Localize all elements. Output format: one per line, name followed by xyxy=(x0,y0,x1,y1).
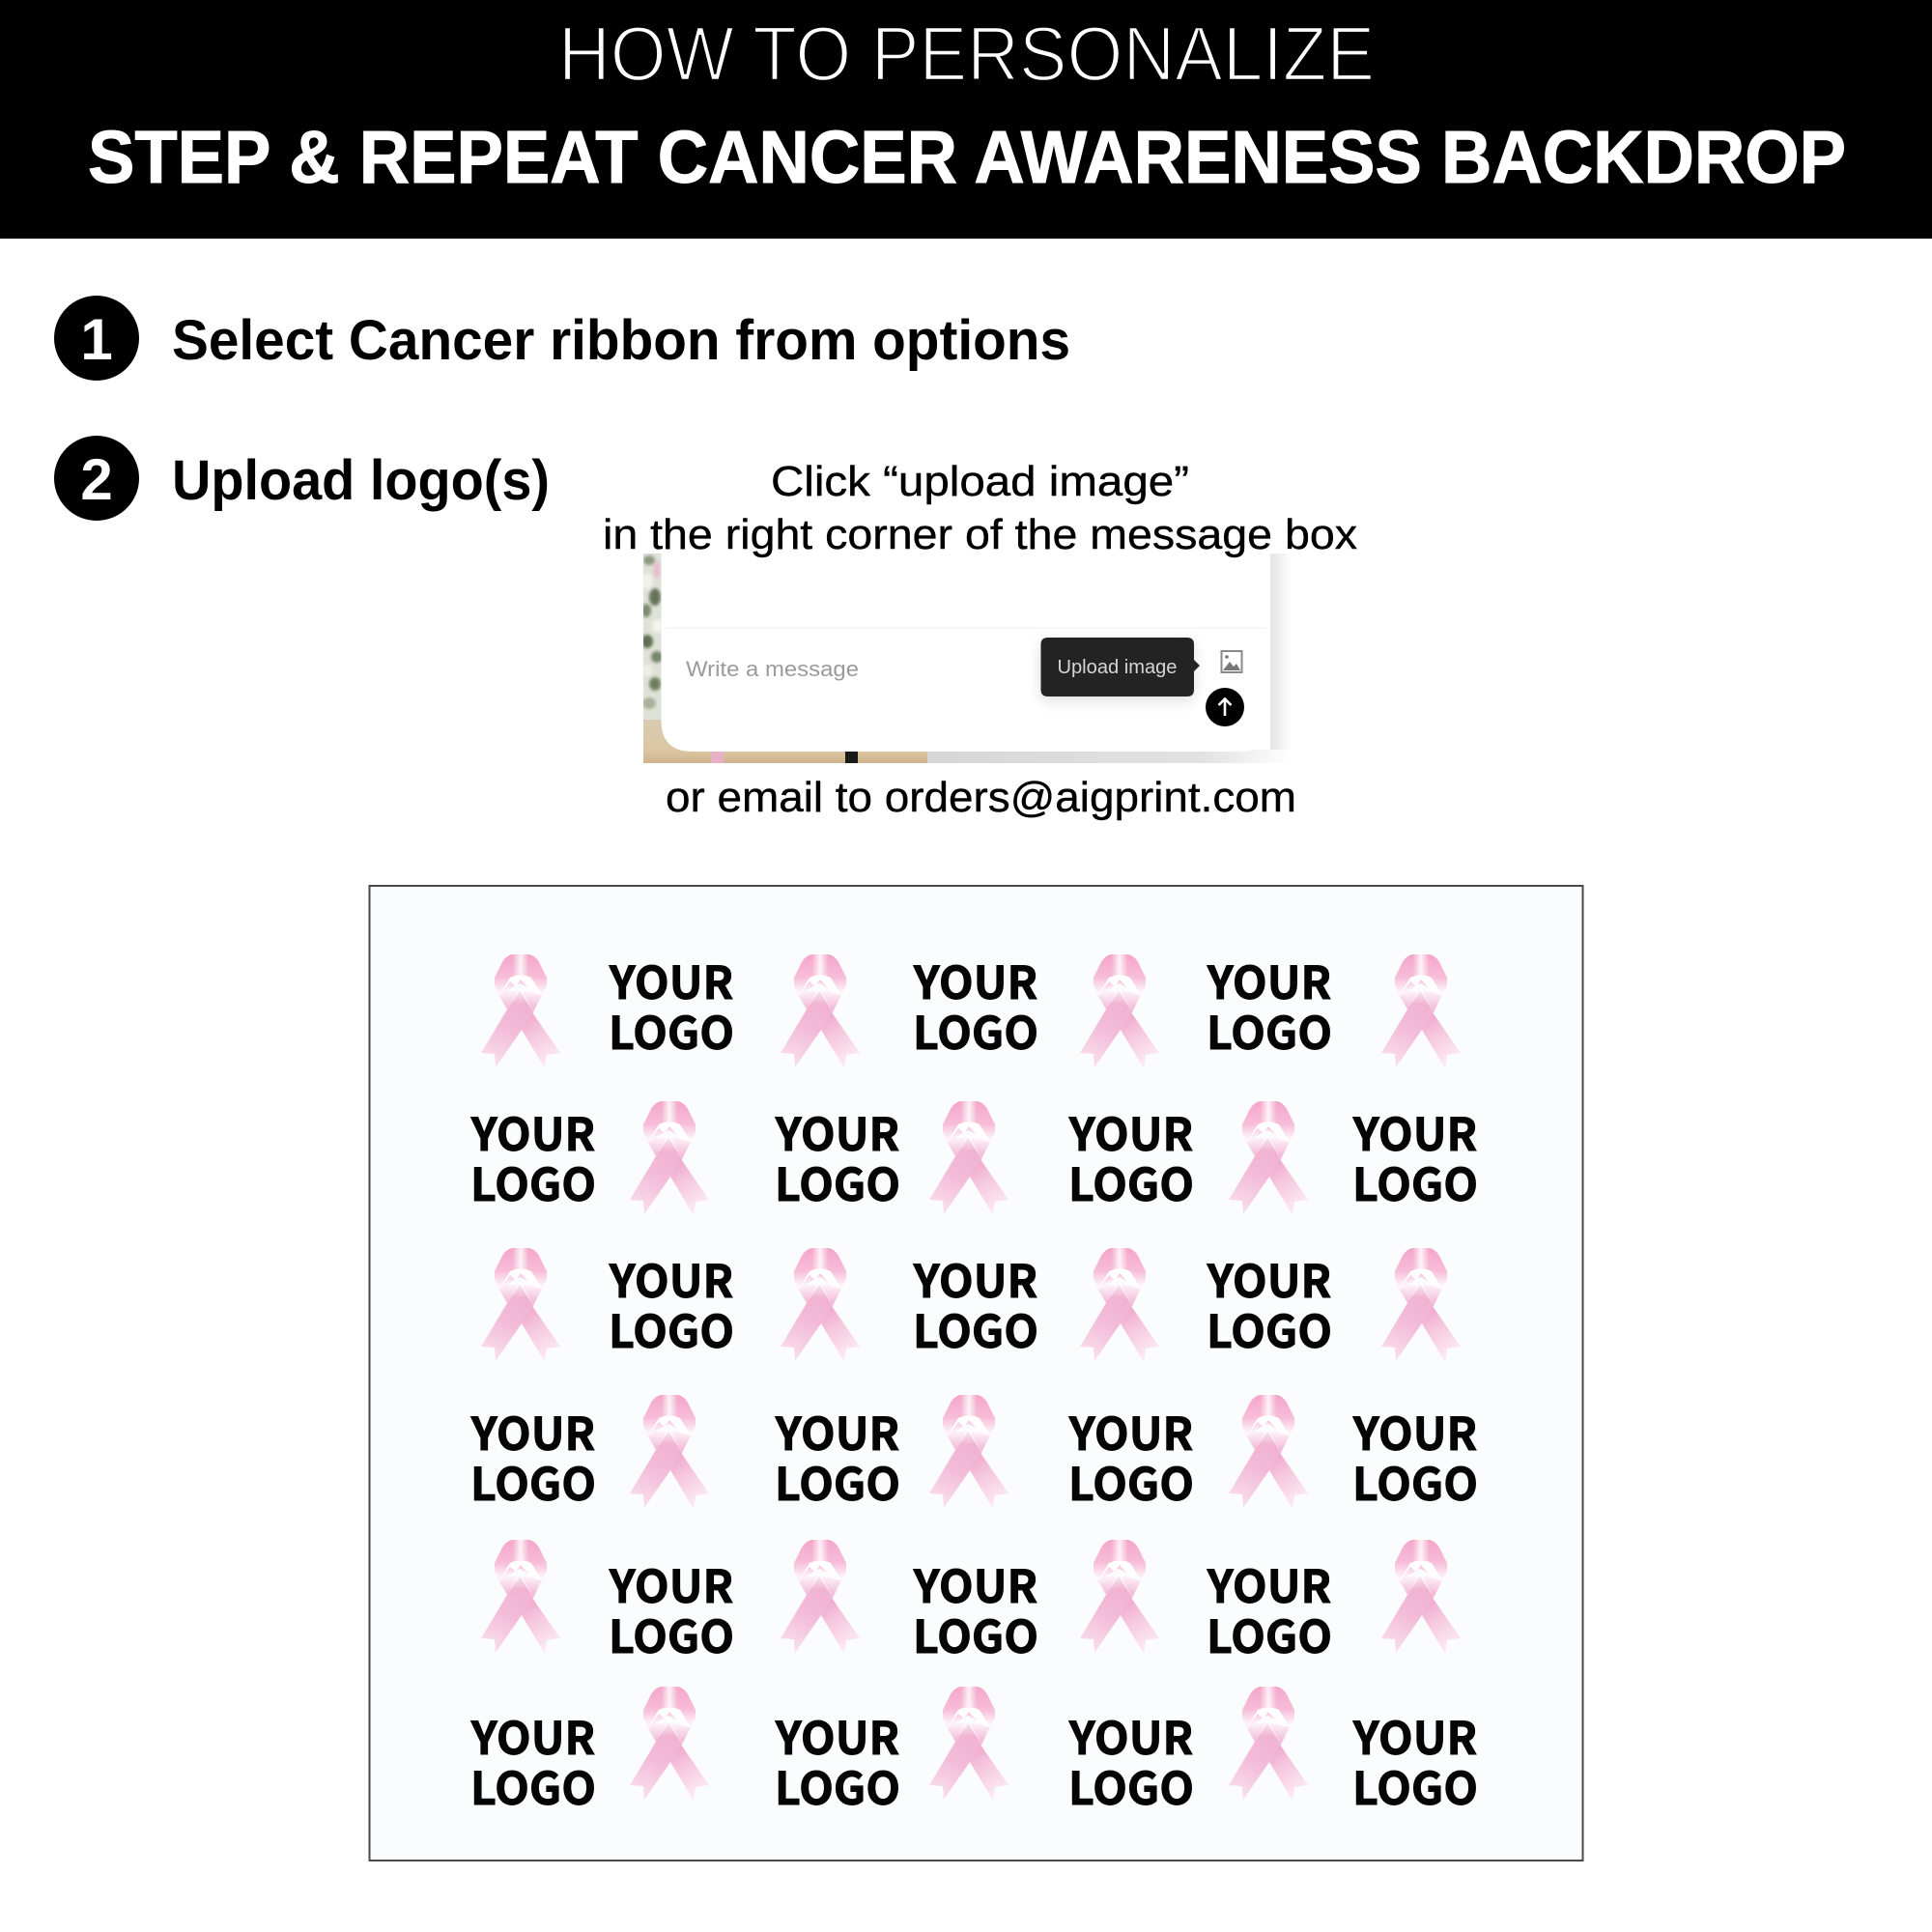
logo placeholder: YOUR xyxy=(1069,1099,1193,1164)
ribbon xyxy=(1381,1248,1461,1362)
ribbon xyxy=(1381,1540,1461,1654)
ribbon xyxy=(781,1248,860,1362)
ribbon xyxy=(929,1101,1009,1215)
row 6 xyxy=(470,1687,1478,1818)
step 2 number badge: 2 xyxy=(80,447,113,512)
upload instructions xyxy=(603,458,1357,558)
ribbon xyxy=(481,1248,560,1362)
logo placeholder: LOGO xyxy=(609,1296,734,1361)
upload instructions: in the right corner of the message box xyxy=(603,511,1357,558)
step 1 xyxy=(54,296,1070,381)
ribbon xyxy=(1381,954,1461,1068)
ribbon xyxy=(481,954,560,1068)
logo placeholder: LOGO xyxy=(913,1602,1038,1666)
logo placeholder: YOUR xyxy=(914,1246,1037,1311)
logo placeholder: LOGO xyxy=(913,1296,1038,1361)
step 2 number badge xyxy=(54,436,139,521)
message box screenshot xyxy=(641,554,1293,763)
logo placeholder: YOUR xyxy=(1353,1099,1477,1164)
logo placeholder: YOUR xyxy=(610,1246,733,1311)
logo placeholder: LOGO xyxy=(775,1449,900,1514)
ribbon xyxy=(1229,1101,1308,1215)
ribbon xyxy=(481,1540,560,1654)
row 4 xyxy=(470,1395,1478,1514)
logo placeholder: YOUR xyxy=(776,1399,899,1463)
logo placeholder: YOUR xyxy=(1208,1246,1331,1311)
ribbon xyxy=(1080,954,1159,1068)
logo placeholder: LOGO xyxy=(470,1449,596,1514)
ribbon xyxy=(630,1395,709,1509)
icon: send arrow xyxy=(1206,688,1244,726)
step 2 xyxy=(54,436,550,521)
logo placeholder: LOGO xyxy=(470,1150,596,1214)
logo placeholder: YOUR xyxy=(471,1399,595,1463)
logo placeholder: LOGO xyxy=(470,1753,596,1818)
logo placeholder: YOUR xyxy=(776,1703,899,1768)
icon: image upload xyxy=(1221,651,1242,672)
logo placeholder: YOUR xyxy=(1069,1703,1193,1768)
logo placeholder: LOGO xyxy=(1068,1753,1194,1818)
photo strip behind card xyxy=(641,554,927,763)
step 1 number badge xyxy=(54,296,139,381)
row 2 xyxy=(470,1099,1478,1215)
logo placeholder: LOGO xyxy=(913,998,1038,1063)
ribbon xyxy=(1229,1395,1308,1509)
logo placeholder: LOGO xyxy=(1068,1449,1194,1514)
logo placeholder: LOGO xyxy=(1068,1150,1194,1214)
logo placeholder: YOUR xyxy=(1069,1399,1193,1463)
header banner xyxy=(0,0,1932,239)
logo placeholder: LOGO xyxy=(609,998,734,1063)
card shadow xyxy=(1270,554,1293,763)
white message card xyxy=(661,554,1270,752)
row 3 xyxy=(481,1246,1461,1362)
logo placeholder: YOUR xyxy=(1208,948,1331,1012)
email instruction: or email to orders@aigprint.com xyxy=(666,774,1296,821)
title line 1: HOW TO PERSONALIZE xyxy=(558,11,1375,97)
logo placeholder: LOGO xyxy=(1352,1753,1478,1818)
ribbon xyxy=(630,1101,709,1215)
backdrop preview panel xyxy=(369,886,1582,1861)
logo placeholder: YOUR xyxy=(914,1551,1037,1616)
logo placeholder: LOGO xyxy=(775,1753,900,1818)
ribbon xyxy=(781,1540,860,1654)
logo placeholder: LOGO xyxy=(1207,1602,1332,1666)
logo placeholder: LOGO xyxy=(1207,998,1332,1063)
logo placeholder: YOUR xyxy=(914,948,1037,1012)
row 5 xyxy=(481,1540,1461,1666)
tooltip: Upload image xyxy=(1057,657,1177,678)
ribbon xyxy=(929,1395,1009,1509)
ribbon xyxy=(630,1687,709,1801)
logo placeholder: YOUR xyxy=(776,1099,899,1164)
logo placeholder: YOUR xyxy=(1353,1703,1477,1768)
row 1 xyxy=(481,948,1461,1068)
ribbon xyxy=(1080,1248,1159,1362)
upload instructions: Click “upload image” xyxy=(771,458,1189,505)
placeholder text: Write a message xyxy=(686,657,859,681)
ribbon xyxy=(1080,1540,1159,1654)
title line 2: STEP & REPEAT CANCER AWARENESS BACKDROP xyxy=(88,116,1846,199)
logo placeholder: LOGO xyxy=(1352,1150,1478,1214)
logo placeholder: YOUR xyxy=(471,1703,595,1768)
tooltip xyxy=(1040,638,1200,701)
logo placeholder: LOGO xyxy=(775,1150,900,1214)
logo placeholder: LOGO xyxy=(1352,1449,1478,1514)
step 1 number badge: 1 xyxy=(80,307,113,372)
logo placeholder: YOUR xyxy=(1353,1399,1477,1463)
logo placeholder: YOUR xyxy=(1208,1551,1331,1616)
ribbon xyxy=(781,954,860,1068)
logo placeholder: YOUR xyxy=(610,948,733,1012)
logo placeholder: YOUR xyxy=(610,1551,733,1616)
ribbon xyxy=(1229,1687,1308,1801)
step 2 text: Upload logo(s) xyxy=(172,449,550,512)
logo placeholder: LOGO xyxy=(609,1602,734,1666)
step 1 text: Select Cancer ribbon from options xyxy=(172,309,1070,372)
ribbon xyxy=(929,1687,1009,1801)
logo placeholder: YOUR xyxy=(471,1099,595,1164)
logo placeholder: LOGO xyxy=(1207,1296,1332,1361)
